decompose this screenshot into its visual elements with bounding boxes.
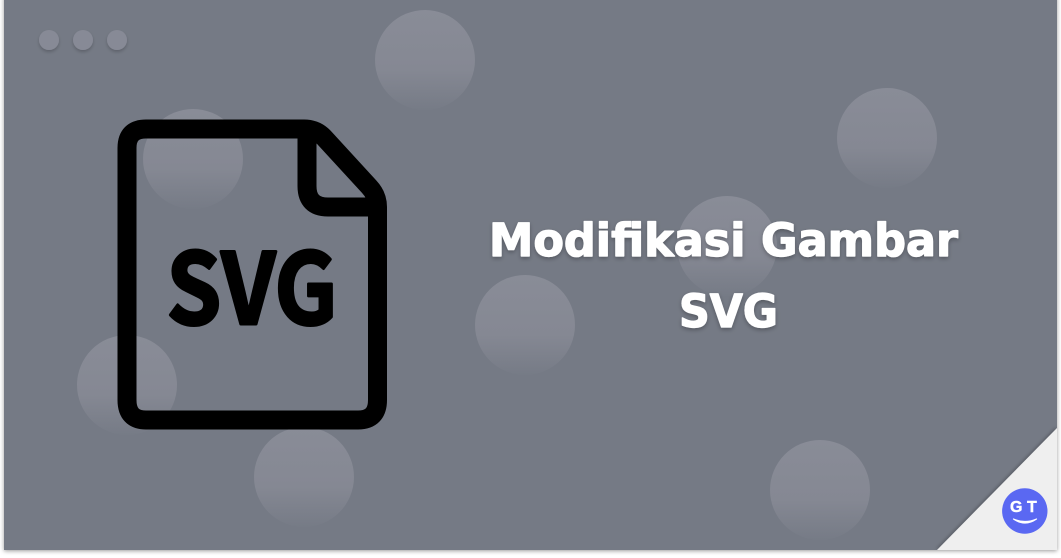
logo: GT smile badge: T	[1027, 499, 1037, 516]
logo: GT smile badge: G	[1010, 499, 1022, 516]
logo: GT smile badge	[1002, 488, 1048, 534]
icon: SVG file	[127, 129, 378, 420]
icon: SVG file: SVG	[166, 211, 338, 353]
title: SVG	[679, 285, 778, 338]
window dots	[39, 30, 127, 50]
corner fold triangle	[937, 428, 1057, 550]
decorative circles	[77, 10, 937, 540]
title	[489, 214, 959, 338]
title: Modifikasi Gambar	[489, 214, 959, 267]
